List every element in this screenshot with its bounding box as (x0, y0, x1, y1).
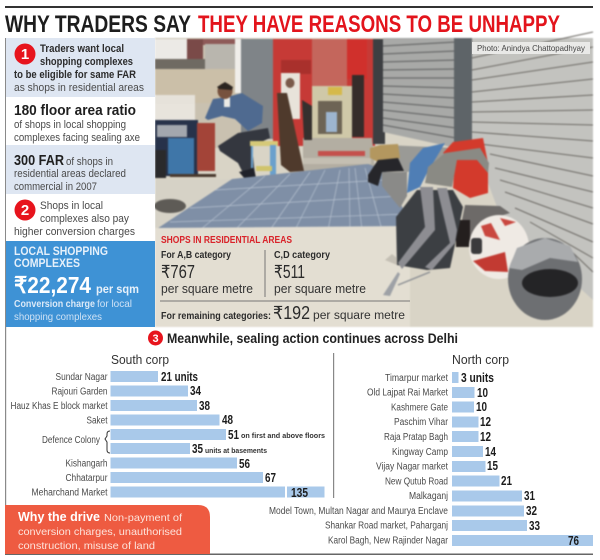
panel: local shopping complexes charge: COMPLEXES (14, 256, 80, 270)
values: 21 (501, 473, 512, 488)
values: 56 (239, 456, 250, 471)
values (461, 370, 579, 548)
values: 48 (222, 412, 233, 427)
stat: 300 FAR (14, 152, 126, 193)
photo: closed shops with bags and helmets (154, 32, 593, 327)
panel: shops in residential areas (160, 234, 410, 323)
category C,D rate: ₹511 (274, 262, 305, 282)
values: 10 (476, 399, 487, 414)
panel: left column reasons (6, 38, 155, 327)
values: 12 (480, 429, 491, 444)
stat: 300 FAR: residential areas declared (14, 168, 126, 180)
labels (10, 372, 108, 498)
reason 1: Traders want local (40, 43, 124, 55)
stat: 300 FAR: commercial in 2007 (14, 181, 97, 193)
labels: New Qutub Road (385, 476, 448, 488)
callout: why the drive: conversion charges, unauthorised (18, 526, 182, 538)
stat: 300 FAR: 300 FAR (14, 152, 64, 169)
reason 2: complexes also pay (40, 213, 129, 225)
bar chart: North corp (269, 352, 593, 548)
values: units at basements (205, 446, 267, 455)
shopfront background (155, 38, 278, 148)
category C,D rate: C,D category (274, 249, 330, 261)
reason 1 (14, 43, 144, 94)
stat: 180 floor area ratio: complexes facing sealing axe (14, 132, 140, 144)
values: 34 (190, 383, 202, 398)
remaining categories rate: ₹192 (273, 303, 310, 323)
panel: local shopping complexes charge: ₹22,274 (14, 272, 91, 298)
photo credit: Photo: Anindya Chattopadhyay (477, 43, 586, 53)
values: 14 (485, 444, 497, 459)
steps and mat (303, 138, 375, 172)
title: WHY TRADERS SAY (5, 11, 191, 38)
reason 1: 1 (21, 46, 29, 63)
stat: 300 FAR: of shops in (66, 156, 113, 168)
category A,B rate: For A,B category (161, 249, 231, 261)
reason 2 (14, 200, 135, 238)
man on the phone (205, 82, 270, 179)
helmets (469, 215, 582, 320)
callout: why the drive (5, 505, 210, 554)
reason 1: as shops in residential areas (14, 82, 144, 94)
sale cart (155, 104, 216, 178)
reason 1: shopping complexes (40, 56, 133, 68)
reason 2: Shops in local (40, 200, 103, 212)
labels: Rajouri Garden (52, 386, 108, 398)
step by the shutter (382, 172, 407, 208)
labels: Paschim Vihar (394, 417, 449, 428)
values: 51 (228, 427, 239, 442)
labels: Chhatarpur (66, 473, 108, 484)
labels: Defence Colony (42, 435, 100, 446)
values: 33 (529, 518, 540, 533)
labels: Saket (86, 416, 108, 426)
values: 31 (524, 488, 535, 503)
leaning boards (277, 93, 304, 172)
labels: Raja Pratap Bagh (384, 432, 448, 443)
shutter right (472, 32, 593, 300)
stat: 180 floor area ratio: of shops in local shopping (14, 119, 126, 131)
values: 10 (477, 385, 488, 400)
category A,B rate (161, 249, 253, 296)
labels: Sundar Nagar (56, 372, 108, 383)
reason 2: higher conversion charges (14, 226, 135, 238)
panel: local shopping complexes charge: per sqm (96, 282, 139, 296)
bars (110, 371, 324, 498)
values: 21 units (161, 369, 198, 384)
reason 1: to be eligible for same FAR (14, 69, 136, 81)
callout: why the drive: construction, misuse of land (18, 540, 155, 552)
labels: Timarpur market (385, 373, 448, 384)
remaining categories rate: For remaining categories: (161, 310, 271, 322)
labels (269, 373, 449, 546)
panel: local shopping complexes charge: for local (97, 298, 132, 310)
category A,B rate: ₹767 (161, 262, 195, 282)
labels: Kingway Camp (392, 447, 448, 458)
labels: Model Town, Multan Nagar and Maurya Enclave (269, 506, 448, 517)
values: 38 (199, 398, 210, 413)
values: 32 (526, 503, 537, 518)
callout: why the drive: Non-payment of (104, 512, 182, 524)
labels: Shankar Road market, Paharganj (325, 520, 448, 532)
category C,D rate (274, 249, 366, 296)
callout: why the drive: Why the drive (18, 510, 100, 524)
labels: Vijay Nagar market (376, 462, 448, 472)
values: 3 units (461, 370, 494, 385)
labels: Malkaganj (409, 491, 448, 502)
labels: Kashmere Gate (391, 402, 448, 414)
labels: Karol Bagh, New Rajinder Nagar (328, 536, 449, 546)
reason 2: 2 (21, 202, 29, 219)
stat: 180 floor area ratio: 180 floor area ratio (14, 102, 136, 119)
category C,D rate: per square metre (274, 282, 366, 296)
bar chart: South corp (10, 352, 325, 500)
shutter left (383, 38, 456, 148)
red corridor (273, 39, 385, 146)
stool (250, 141, 278, 175)
values: 35 (192, 441, 203, 456)
bars (452, 372, 593, 546)
bags (383, 138, 510, 296)
values: 135 (291, 485, 308, 500)
values: 15 (487, 458, 498, 473)
heading: sealing action: Meanwhile, sealing action continues across Delhi (167, 330, 458, 346)
values (161, 369, 325, 500)
panel: shops in residential areas: SHOPS IN RESIDENTIAL AREAS (161, 234, 292, 246)
category A,B rate: per square metre (161, 282, 253, 296)
labels: Old Lajpat Rai Market (367, 388, 448, 398)
small bags (368, 144, 404, 186)
title (5, 11, 560, 38)
panel: local shopping complexes charge (6, 241, 155, 327)
values: 76 (568, 533, 579, 548)
tiled floor (154, 164, 412, 232)
values: on first and above floors (241, 431, 325, 440)
stat: 180 floor area ratio (14, 102, 140, 144)
remaining categories rate: per square metre (313, 310, 405, 322)
bar chart: South corp: South corp (111, 352, 169, 367)
remaining categories rate (161, 303, 405, 323)
values: 12 (480, 414, 491, 429)
bar chart: North corp: North corp (452, 352, 509, 367)
labels: Kishangarh (66, 458, 108, 470)
panel: local shopping complexes charge: LOCAL SHOPPING (14, 244, 108, 258)
labels: Hauz Khas E block market (10, 401, 108, 412)
panel: local shopping complexes charge: shopping complexes (14, 311, 102, 323)
labels: Meharchand Market (32, 488, 108, 498)
panel: local shopping complexes charge: Conversion charge (14, 298, 95, 310)
values: 67 (265, 470, 276, 485)
heading: sealing action: 3 (152, 333, 159, 345)
